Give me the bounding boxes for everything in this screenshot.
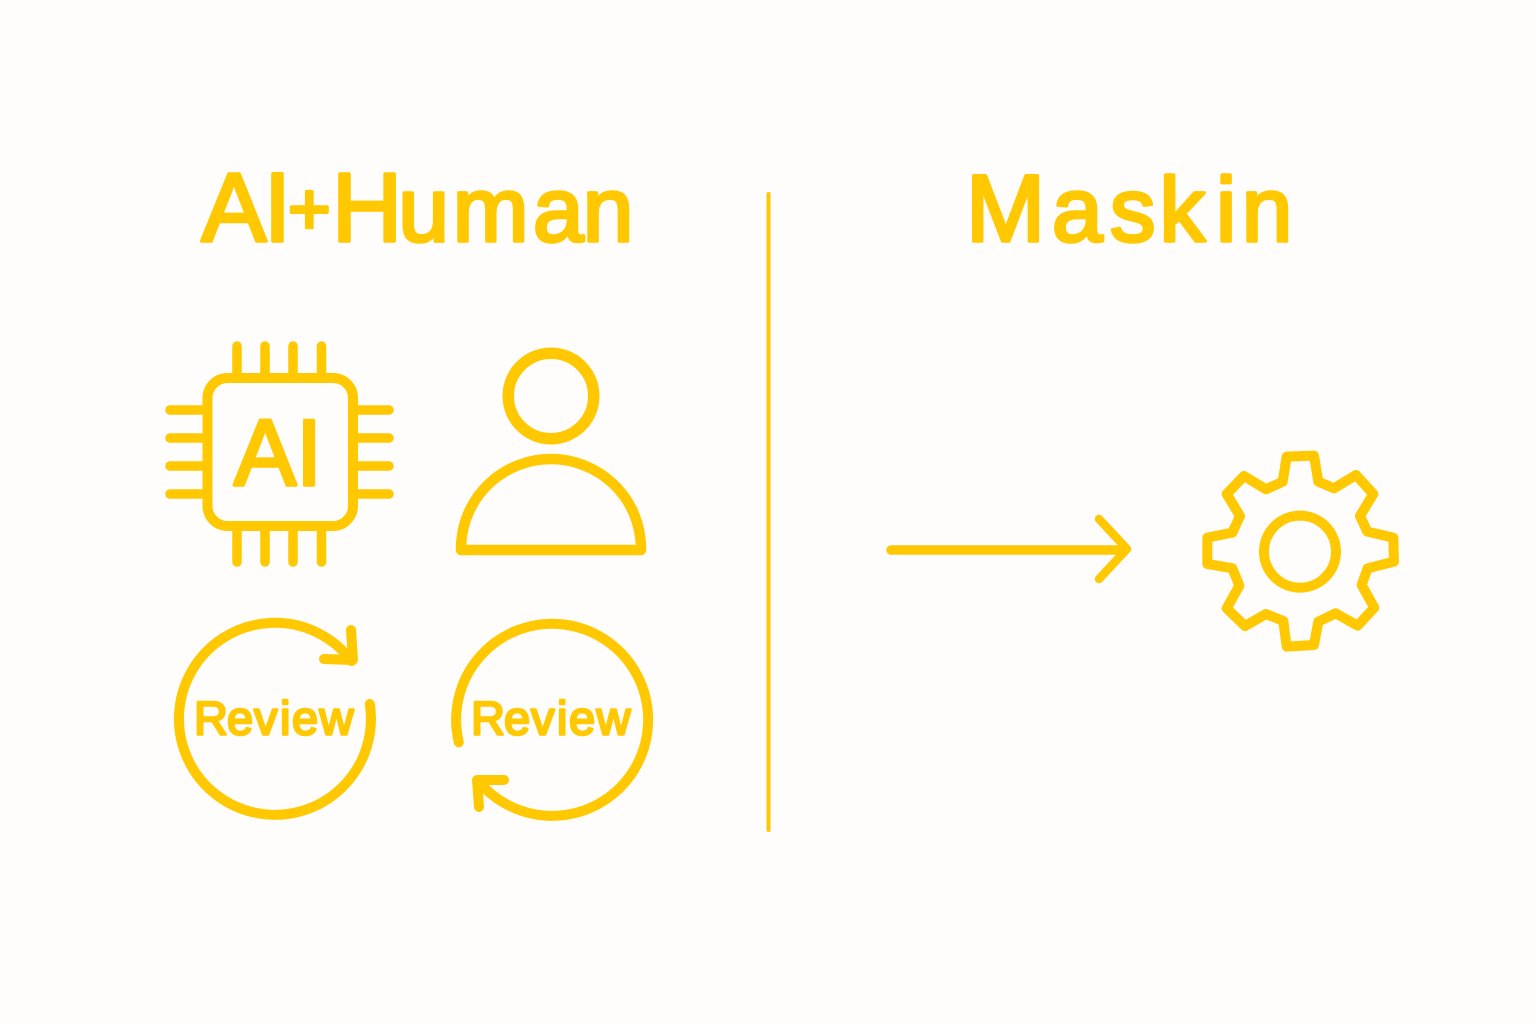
cycle arc: [456, 624, 648, 816]
arrow shaft: [891, 545, 1124, 555]
review label: Review: [194, 692, 354, 745]
icon: review cycle clockwise: [179, 623, 371, 815]
heading: Maskin: askin: [1052, 160, 1292, 261]
arrowhead: [477, 780, 504, 807]
chip label: AI: [234, 400, 322, 505]
cycle arc: [179, 623, 371, 815]
review label: Review: [471, 692, 632, 745]
heading: AI+Human: H: [332, 153, 402, 262]
divider between columns: [766, 194, 770, 830]
icon: gear: [1207, 456, 1394, 647]
person head: [508, 353, 594, 439]
icon: AI chip: [170, 346, 389, 562]
heading: AI+Human: +: [288, 169, 331, 250]
icon: person: [461, 353, 641, 550]
chip pins: [170, 346, 389, 562]
gear hub: [1264, 516, 1336, 588]
heading: AI+Human: uman: [398, 160, 633, 261]
icon: review cycle counterclockwise: [456, 624, 648, 816]
arrow: [891, 519, 1127, 579]
gear outline: [1207, 456, 1394, 647]
heading: AI+Human: AI: [202, 153, 291, 262]
chip body: [208, 378, 353, 526]
arrow head: [1099, 519, 1127, 579]
person shoulders: [461, 459, 641, 550]
arrowhead: [324, 630, 353, 660]
heading: Maskin: M: [966, 156, 1045, 262]
